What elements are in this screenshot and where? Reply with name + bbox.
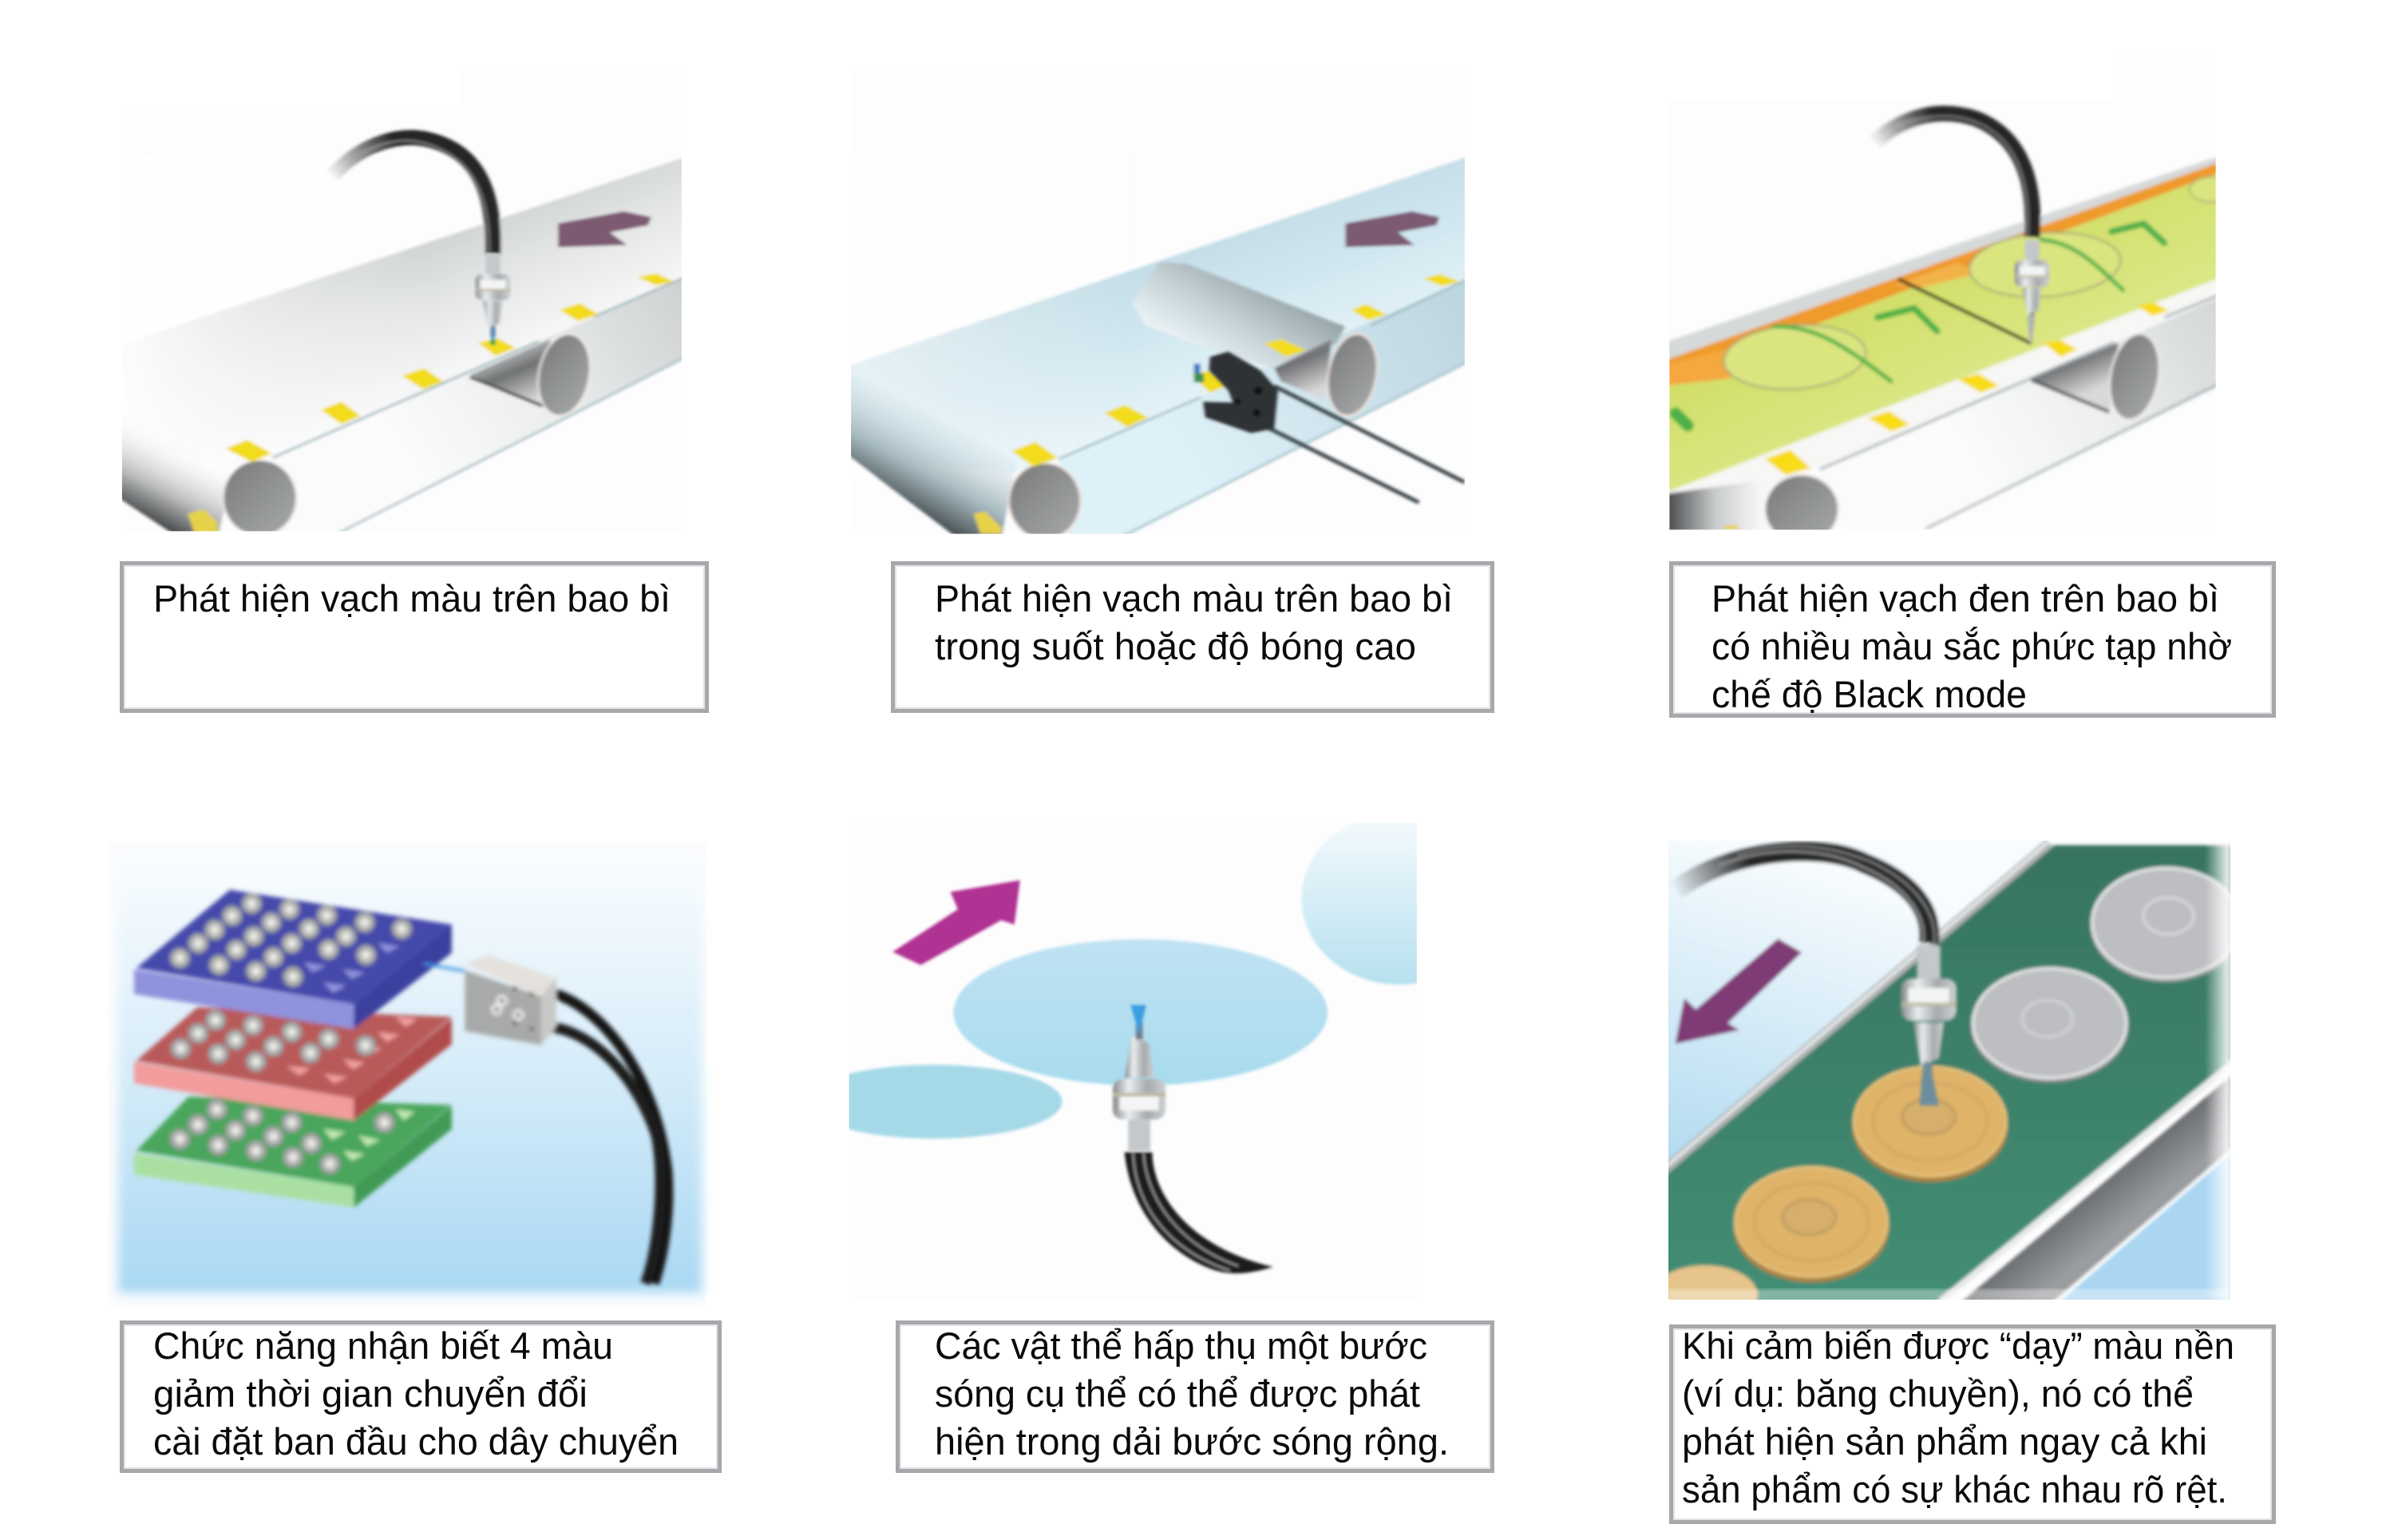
light beam	[424, 964, 465, 971]
fibre sensor head	[2015, 240, 2050, 324]
caption box 3: chế độ Black mode	[1711, 673, 2027, 715]
caption box 6: phát hiện sản phẩm ngay cả khi	[1682, 1420, 2207, 1463]
gold coin	[1853, 1067, 2008, 1182]
caption box 1: Phát hiện vạch màu trên bao bì	[153, 577, 671, 620]
fibre cable	[1125, 1152, 1273, 1273]
caption box 5: hiện trong dải bước sóng rộng.	[935, 1420, 1449, 1463]
black mark	[1898, 279, 2031, 343]
caption box 6: sản phẩm có sự khác nhau rõ rệt.	[1682, 1468, 2227, 1510]
blue objects	[805, 812, 1498, 1138]
fibre sensor head	[1113, 1022, 1165, 1150]
caption box 4: giảm thời gian chuyển đổi	[153, 1372, 588, 1415]
illustration: coins on green belt	[1652, 836, 2242, 1324]
caption box 4: Chức năng nhận biết 4 màu	[153, 1324, 613, 1367]
caption box 3: có nhiều màu sắc phức tạp nhờ	[1711, 625, 2232, 667]
fork sensor	[1203, 351, 1278, 433]
illustration: fork sensor on conveyor	[851, 156, 1465, 534]
silver coin	[2091, 868, 2242, 982]
arrow: travel direction	[892, 880, 1020, 965]
caption box 5: Các vật thể hấp thụ một bước	[935, 1324, 1427, 1367]
arrow: travel direction	[1345, 212, 1439, 247]
cable	[1875, 113, 2032, 237]
panel 5: wide wavelength detection	[805, 812, 1498, 1471]
panel 6: background teaching with coins	[1652, 836, 2273, 1522]
cable	[332, 137, 493, 254]
caption box 2: Phát hiện vạch màu trên bao bì	[935, 577, 1453, 620]
illustration: sensor under blue objects	[805, 812, 1498, 1301]
caption box 3	[1672, 564, 2273, 715]
caption box 2: trong suốt hoặc độ bóng cao	[935, 625, 1416, 667]
panel 4: four colour recognition	[108, 842, 720, 1471]
arrow: travel direction	[558, 212, 651, 247]
caption box 6	[1672, 1324, 2273, 1522]
yellow marks	[226, 273, 675, 462]
fibre cables	[1274, 386, 1465, 482]
panel 1: colour mark on packaging	[112, 70, 707, 711]
panel 2: transparent or glossy packaging	[851, 156, 1494, 713]
arrow: travel direction	[1676, 939, 1802, 1043]
illustration: sensor over printed film	[1669, 102, 2216, 530]
panel 3: black mark on multi-colour packaging	[1664, 50, 2273, 715]
red tray	[134, 1008, 452, 1120]
caption box 5: sóng cụ thể có thể được phát	[935, 1372, 1420, 1415]
cable	[1676, 851, 1929, 944]
sensor block	[465, 955, 556, 1045]
blue beam	[1130, 1005, 1146, 1034]
fibre cables	[548, 992, 668, 1284]
caption box 6: Khi cảm biến được “dạy” màu nền	[1682, 1324, 2234, 1367]
caption box 4: cài đặt ban đầu cho dây chuyển	[153, 1420, 679, 1463]
illustration: fibre sensor over conveyor	[121, 128, 682, 532]
caption box 6: (ví dụ: băng chuyền), nó có thể	[1682, 1372, 2194, 1415]
green tray	[134, 1096, 452, 1207]
printed leaf shapes	[1722, 320, 1868, 394]
yellow marks	[1765, 303, 2169, 475]
gold coin	[1734, 1167, 1889, 1283]
blue tray	[134, 889, 452, 1029]
caption box 1	[121, 564, 707, 711]
caption box 5	[897, 1322, 1493, 1471]
fibre sensor head	[1901, 945, 1957, 1081]
caption box 2	[892, 564, 1493, 711]
fibre sensor head	[476, 254, 510, 337]
caption box 4	[121, 1322, 720, 1471]
illustration: coloured trays and sensor	[108, 842, 706, 1308]
partial gold coin	[1652, 1265, 1758, 1324]
yellow marks	[1011, 274, 1460, 467]
silver coin	[1971, 968, 2128, 1083]
caption box 3: Phát hiện vạch đen trên bao bì	[1711, 577, 2219, 620]
